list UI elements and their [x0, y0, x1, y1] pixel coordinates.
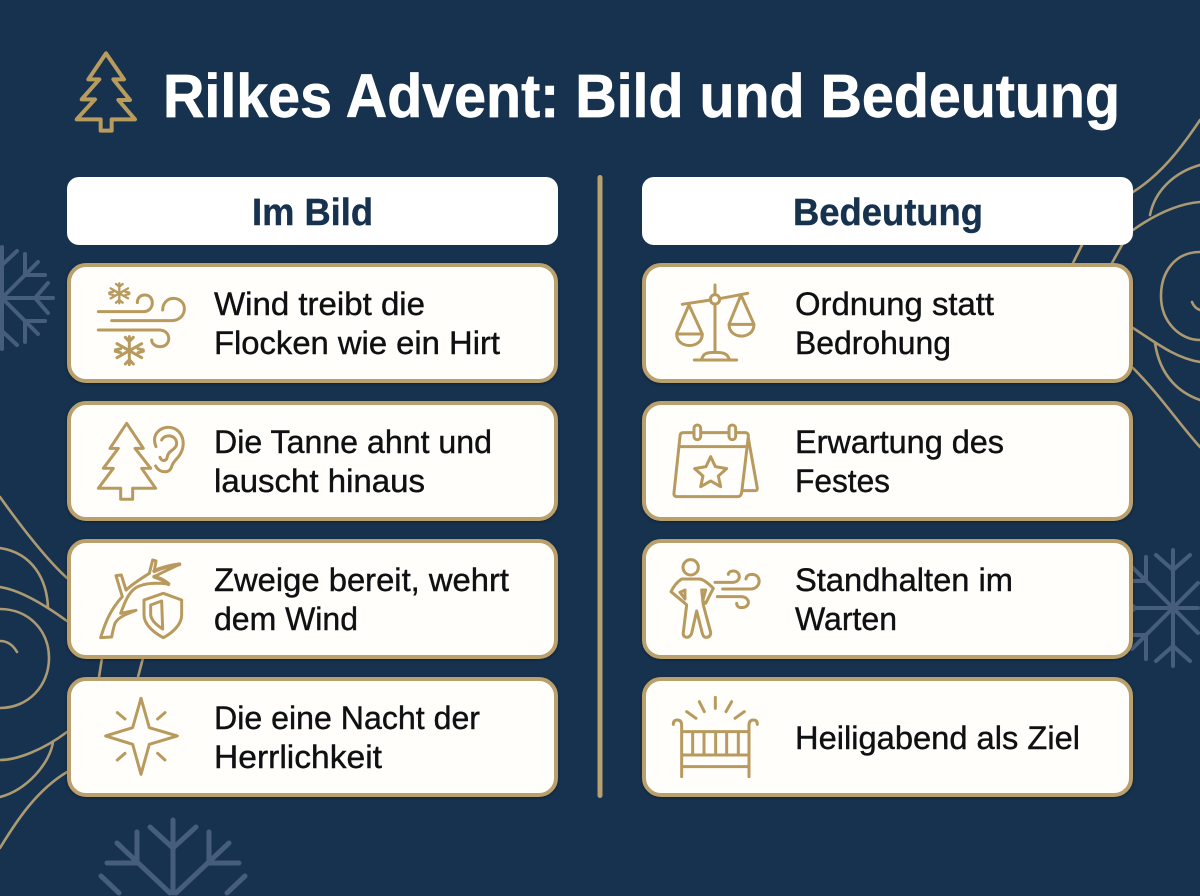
text: Wind treibt die [214, 286, 425, 322]
icon: person in wind [671, 560, 759, 637]
header: Bedeutung [642, 177, 1133, 245]
gold swirls right [1073, 120, 1200, 447]
text: Bedrohung [795, 325, 951, 361]
icon: four-point star [106, 698, 177, 774]
icon: calendar with star [674, 425, 757, 497]
card: Standhalten [644, 541, 1131, 657]
text: lauscht hinaus [214, 463, 425, 499]
text: Die Tanne ahnt und [214, 424, 492, 460]
text: Heiligabend als Ziel [795, 720, 1080, 756]
text: Flocken wie ein Hirt [214, 325, 500, 361]
text [214, 700, 480, 775]
text [795, 424, 1004, 499]
header: Bedeutung: Bedeutung [793, 192, 983, 234]
text: Ordnung statt [795, 286, 994, 322]
header: Im Bild: Im Bild [252, 192, 373, 234]
icon: wind and snowflakes [98, 283, 184, 365]
text [214, 562, 509, 637]
text: Erwartung des [795, 424, 1004, 460]
text: Standhalten im [795, 562, 1013, 598]
card: Nacht [69, 679, 556, 795]
text [795, 286, 994, 361]
text [214, 286, 500, 361]
text: Herrlichkeit [214, 739, 382, 775]
panel: Bedeutung [642, 177, 1133, 795]
panel: Im Bild [67, 177, 558, 795]
card: Erwartung [644, 403, 1131, 519]
header: Im Bild [67, 177, 558, 245]
gold swirls left [0, 497, 143, 848]
text: Zweige bereit, wehrt [214, 562, 509, 598]
card: Tanne [69, 403, 556, 519]
card: Ordnung [644, 265, 1131, 381]
icon: branch and shield [101, 560, 182, 638]
text [214, 424, 492, 499]
text: dem Wind [214, 601, 358, 637]
card: Wind [69, 265, 556, 381]
icon: fir tree and ear [98, 423, 183, 499]
title [77, 53, 1120, 131]
snowflake left [2, 247, 53, 349]
text: Die eine Nacht der [214, 700, 480, 736]
text [795, 562, 1013, 637]
title text: Rilkes Advent: Bild und Bedeutung [163, 62, 1120, 130]
icon: crib with rays [673, 697, 757, 777]
snowflake right [1115, 550, 1198, 666]
card: Heiligabend [644, 679, 1131, 795]
icon: fir tree [77, 53, 135, 131]
text: Warten [795, 601, 897, 637]
column divider [598, 175, 602, 798]
text: Festes [795, 463, 890, 499]
icon: scales [677, 285, 754, 360]
snowflake bottom [101, 820, 245, 893]
card: Zweige [69, 541, 556, 657]
